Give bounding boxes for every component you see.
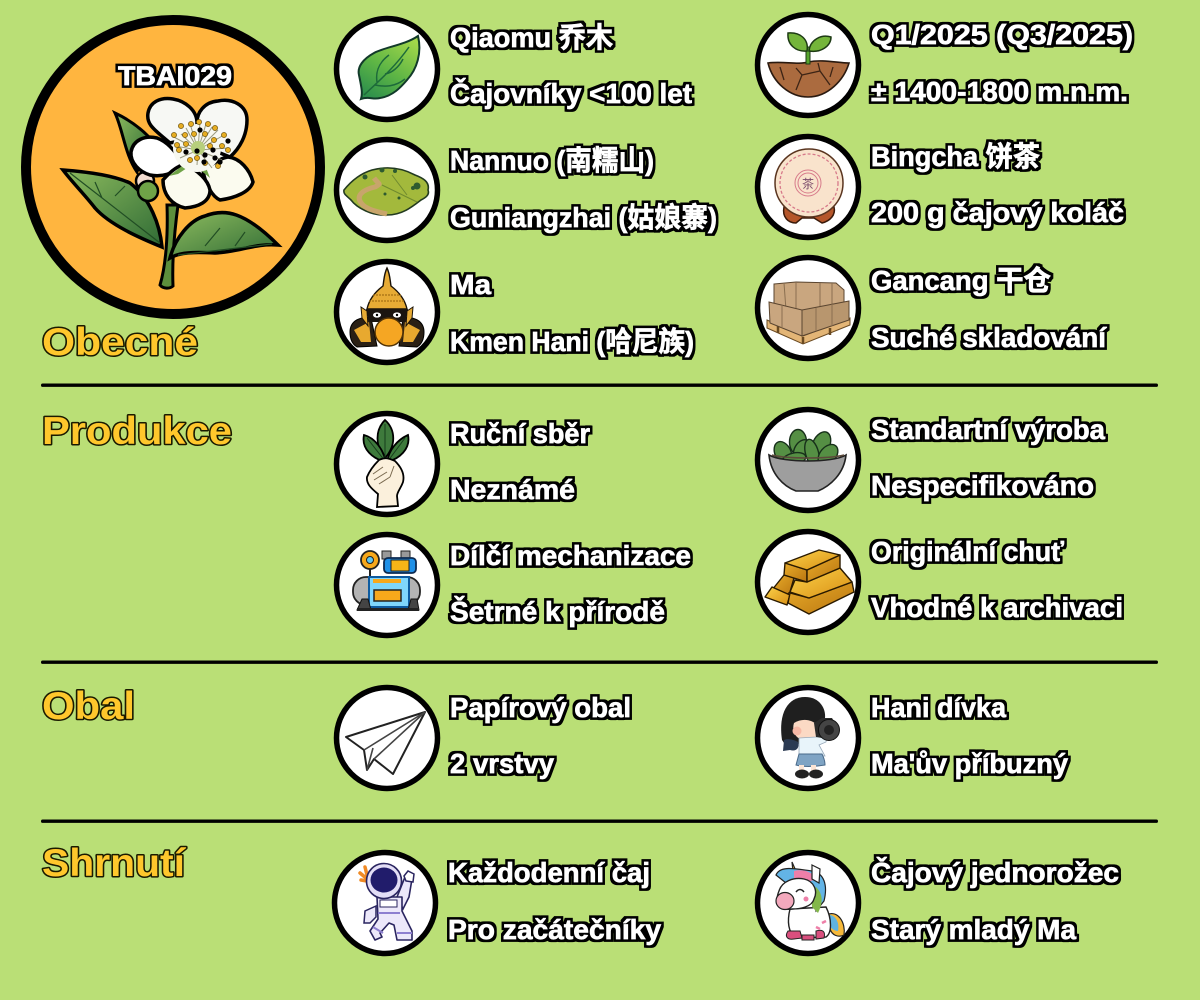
panel: Obecné [26, 14, 1133, 364]
text: Q1/2025 [871, 19, 1133, 107]
text: Hani dívka: Hani dívka [871, 692, 1006, 723]
text: Dílčí mechanizace: Šetrné k přírodě [450, 595, 665, 627]
panel: Shrnutí [42, 842, 1119, 954]
icon: pallet of boxes [758, 258, 858, 358]
divider [41, 660, 1158, 664]
text: Standartní výroba [871, 414, 1105, 501]
icon: sprout in soil [758, 14, 858, 116]
text: Standartní výroba: Standartní výroba [871, 414, 1105, 445]
icon: paper plane [336, 688, 438, 788]
icon: Hani girl with camera [758, 688, 858, 788]
text: Ma: Kmen Hani (哈尼族) [450, 326, 694, 357]
item: Bingcha [758, 136, 1124, 238]
text: Čajový jednorožec: Čajový jednorožec [871, 856, 1119, 888]
text: Nannuo [450, 145, 717, 233]
text: Originální chuť: Originální chuť [871, 536, 1065, 567]
text: Dílčí mechanizace: Dílčí mechanizace [450, 540, 691, 571]
icon: tea flower [63, 99, 278, 288]
text: Bingcha [871, 141, 1124, 228]
icon: Ma guardian [336, 262, 438, 362]
item: Standartní výroba [758, 410, 1105, 510]
item: Qiaomu [336, 18, 692, 120]
text: Standartní výroba: Nespecifikováno [871, 470, 1094, 501]
text: Nannuo: Nannuo (南糯山) [450, 145, 654, 176]
icon: leaf [336, 18, 438, 120]
icon: tea cake on stand: 茶 [802, 176, 814, 191]
text: Dílčí mechanizace [450, 540, 691, 627]
icon: unicorn [758, 852, 858, 954]
item: Ruční sběr [336, 414, 590, 514]
icon: bowl of leaves [758, 410, 858, 510]
icon: hand with leaves [336, 414, 438, 514]
text: Q1/2025: Q1/2025 (Q3/2025) [871, 19, 1133, 50]
item: Dílčí mechanizace [336, 534, 691, 636]
text: Ruční sběr: Ruční sběr [450, 418, 590, 449]
text: Hani dívka [871, 692, 1068, 779]
heading: Obecné: Obecné [42, 321, 198, 364]
text: Papírový obal: Papírový obal [450, 692, 631, 723]
text: Čajový jednorožec [871, 856, 1119, 945]
badge code: TBAI029 [118, 61, 232, 91]
item: Hani dívka [758, 688, 1068, 788]
heading: Obal: Obal [42, 685, 135, 728]
text: Gancang: Suché skladování [871, 322, 1107, 353]
panel: Obal [42, 685, 1068, 788]
badge: TBAI029 flower [26, 20, 320, 314]
item: Q1/2025 [758, 14, 1133, 116]
item: Gancang [758, 258, 1107, 358]
divider [41, 384, 1158, 387]
text: Qiaomu: Qiaomu 乔木 [450, 22, 613, 53]
text: Qiaomu [450, 22, 692, 109]
item: Ma [336, 262, 694, 362]
text: Qiaomu: Čajovníky <100 let [450, 77, 692, 109]
item: Každodenní čaj [334, 852, 661, 954]
panel: Produkce [42, 410, 1123, 636]
heading: Produkce: Produkce [42, 410, 232, 453]
item: Nannuo [336, 140, 717, 240]
item: Originální chuť [758, 532, 1123, 632]
text: Každodenní čaj [448, 857, 661, 945]
text: Každodenní čaj: Každodenní čaj [448, 857, 650, 888]
text: Bingcha: 200 g čajový koláč [871, 197, 1124, 228]
text: Gancang: Gancang 干仓 [871, 265, 1051, 296]
text: Čajový jednorožec: Starý mladý Ma [871, 914, 1076, 945]
text: Originální chuť: Vhodné k archivaci [871, 592, 1123, 623]
text: Q1/2025: ± 1400-1800 m.n.m. [871, 76, 1128, 107]
text: Hani dívka: Ma'ův příbuzný [871, 748, 1068, 779]
icon: astronaut [334, 852, 436, 954]
icon: machine [336, 534, 438, 636]
text: Papírový obal: 2 vrstvy [450, 748, 554, 779]
item: Čajový jednorožec [758, 852, 1119, 954]
text: Nannuo: Guniangzhai (姑娘寨) [450, 202, 717, 233]
text: Ma: Ma [450, 269, 491, 300]
icon: hills [336, 140, 438, 240]
icon: tea cake on stand [758, 136, 858, 238]
text: Bingcha: Bingcha 饼茶 [871, 141, 1040, 172]
icon: gold bars [758, 532, 858, 632]
text: Papírový obal [450, 692, 631, 779]
text: Ruční sběr: Neznámé [450, 474, 575, 505]
item: Papírový obal [336, 688, 631, 788]
heading: Shrnutí: Shrnutí [42, 842, 186, 885]
text: Originální chuť [871, 536, 1123, 623]
text: Každodenní čaj: Pro začátečníky [448, 914, 661, 945]
text: Gancang [871, 265, 1107, 353]
text: Ruční sběr [450, 418, 590, 505]
text: Ma [450, 269, 694, 357]
divider [41, 820, 1158, 823]
